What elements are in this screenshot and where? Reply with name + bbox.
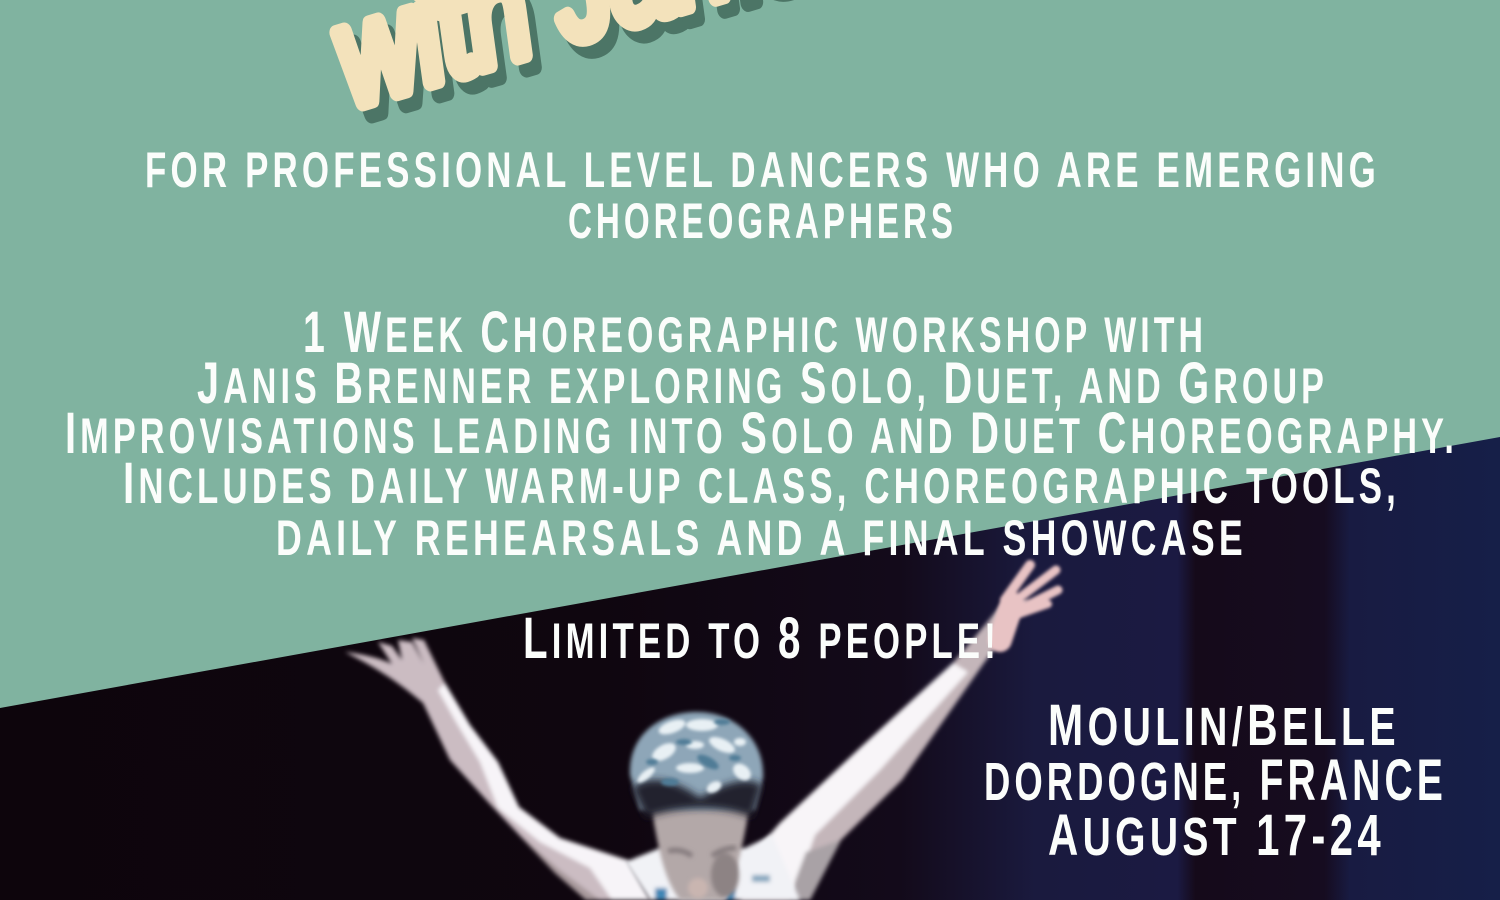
dancer figure bbox=[345, 565, 1058, 900]
intro text block: audience: CHOREOGRAPHERS bbox=[568, 193, 957, 249]
hair bbox=[630, 712, 763, 818]
workshop description text block: JANIS BRENNER EXPLORING SOLO, DUET, AND GROUP bbox=[197, 351, 1328, 416]
face bbox=[650, 808, 751, 900]
right hand with fingers bbox=[1000, 565, 1058, 640]
venue and dates text block bbox=[984, 693, 1447, 868]
intro text block: audience bbox=[145, 142, 1380, 249]
dress and shoulders bbox=[625, 835, 800, 900]
stage backdrop bbox=[0, 430, 1500, 900]
closed eyes and nose shading bbox=[668, 848, 739, 898]
left arm and hand bbox=[345, 638, 650, 900]
venue and dates text block: AUGUST 17-24 bbox=[1048, 803, 1385, 868]
right arm and hand bbox=[740, 600, 1030, 900]
capacity note: LIMITED TO 8 PEOPLE! bbox=[523, 606, 1000, 671]
workshop description text block bbox=[65, 300, 1458, 566]
venue and dates text block: MOULIN/BELLE bbox=[1048, 693, 1400, 758]
photo: dancer on dark stage, diagonal crop bbox=[0, 430, 1500, 900]
